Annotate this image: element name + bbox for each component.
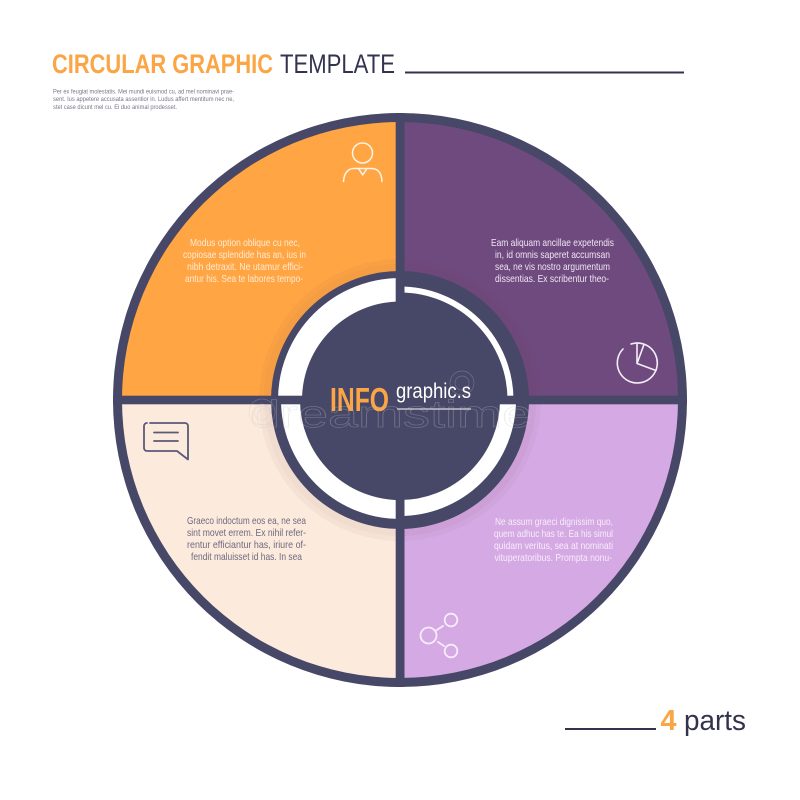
text block: cream: fendit maluisset id has. In sea	[191, 551, 302, 563]
footer label: 4 parts: parts	[684, 705, 746, 737]
text block: cream	[187, 515, 306, 563]
icon: pie chart	[617, 343, 657, 383]
hub centre	[302, 302, 499, 498]
watermark: dreamstime	[250, 394, 532, 436]
text block: cream: sint movet errem. Ex nihil refer-	[187, 527, 306, 539]
dividing cross bars	[113, 113, 687, 687]
intro text block: Per ex feugiat molestatis. Mei mundi euismod cu, ad mel nominavi prae-	[53, 90, 234, 96]
panel: purple quadrant	[400, 122, 678, 400]
title: CIRCULAR GRAPHIC	[52, 49, 273, 79]
text block: purple: dissentias. Ex scribentur theo-	[495, 273, 609, 285]
text block: lilac: vituperatoribus. Prompta nonu-	[494, 552, 612, 564]
text block: orange: nibh detraxit. Ne utamur effici-	[187, 261, 303, 273]
outer ring	[113, 113, 687, 687]
halo around hub	[259, 259, 541, 541]
text block: orange: copiosae splendide has an, ius in	[183, 249, 306, 261]
title: TEMPLATE	[280, 49, 395, 79]
text block: lilac: quem adhuc has te. Ea his simul	[494, 528, 613, 540]
hub label: INFO	[330, 381, 389, 418]
text block: orange: antur his. Sea te labores tempo-	[185, 273, 303, 285]
text block: cream: rentur efficiantur has, iriure of-	[187, 539, 306, 551]
text block: orange: Modus option oblique cu nec,	[190, 237, 300, 249]
intro text block: stet case dicunt mel cu. Ei duo animal prodesset.	[53, 105, 177, 111]
text block: purple: Eam aliquam ancillae expetendis	[491, 237, 614, 249]
watermark	[249, 371, 532, 436]
icon: speech bubble	[144, 423, 188, 460]
circular chart	[113, 113, 687, 687]
title	[52, 49, 684, 79]
text block: lilac: Ne assum graeci dignissim quo,	[495, 516, 613, 528]
text block: orange	[183, 237, 306, 285]
text block: cream: Graeco indoctum eos ea, ne sea	[187, 515, 306, 527]
intro text block	[53, 90, 234, 111]
intro text block: sent. Ius appetere accusata assentior in. Ludus affert mentitum nec ne,	[53, 97, 234, 103]
white arc: bottom left	[290, 400, 400, 510]
panel: lilac quadrant	[400, 400, 678, 678]
text block: lilac: quidam veritus, sea at nominati	[494, 540, 613, 552]
white arc: top right	[400, 290, 510, 400]
footer label: 4 parts: 4	[660, 705, 676, 737]
text block: purple	[491, 237, 614, 285]
text block: lilac	[494, 516, 613, 564]
icon: share network	[420, 614, 457, 657]
hub ring	[271, 271, 529, 529]
hub label: graphic.s	[396, 380, 471, 403]
panel: orange quadrant	[122, 122, 400, 400]
text block: purple: sea, ne vis nostro argumentum	[495, 261, 610, 273]
icon: person	[344, 143, 382, 182]
hub label	[330, 380, 471, 418]
white arc: top left	[290, 290, 400, 400]
text block: purple: in, id omnis saperet accumsan	[495, 249, 610, 261]
footer label: 4 parts	[565, 705, 746, 737]
panel: cream quadrant	[122, 400, 400, 678]
white arc: bottom right	[400, 400, 508, 508]
